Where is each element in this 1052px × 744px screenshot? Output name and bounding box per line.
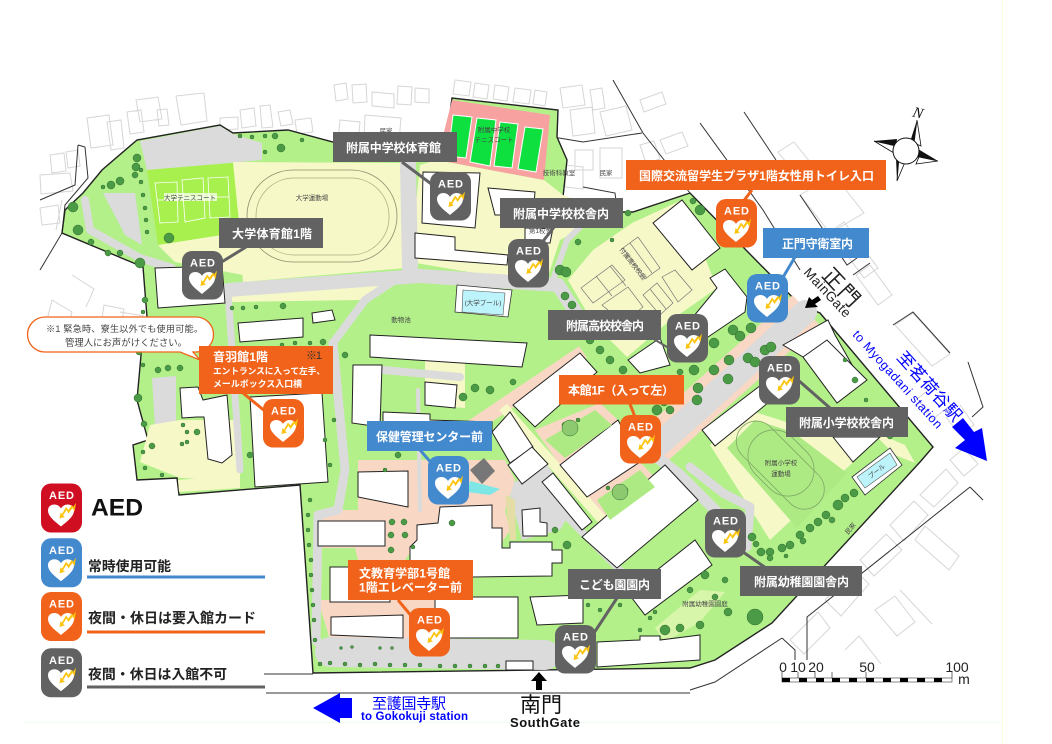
label: to Gokokuji station: to Gokokuji station [361,711,468,723]
elementary school field [727,413,847,528]
callout: 附属高校校舎内 [548,310,672,350]
icon: AED blue main gate [747,274,788,322]
icon: AED orange main hall: AED [628,422,653,434]
icon: AED orange [41,592,82,641]
scale bar [779,659,970,687]
icon: AED red: AED [49,490,74,502]
yellow diagonal walkway [503,407,607,525]
icon: AED orange Otowa: AED [271,406,296,418]
small map labels: 技術科教室 [543,168,576,177]
callout: 音羽館1階: エントランスに入って左手、 [213,365,325,376]
callout: 附属幼稚園園舎内: 附属幼稚園園舎内 [754,574,849,589]
icon: AED grey kindergarten [705,509,746,558]
callout: 本館1F: 本館1F（入って左） [568,382,674,398]
junior high tennis court: 附属中学校 [478,125,511,134]
legend: entry card needed [87,610,265,634]
callout: 文教育学部1号館: 1階エレベーター前 [359,580,462,594]
callout: 国際交流留学生プラザ1階女性用トイレ入口 [626,160,886,203]
label: South Gate: SouthGate [510,715,580,730]
icon: AED grey [41,648,82,697]
campus grounds [62,98,933,673]
label: to Gokokuji station: 至護国寺駅 [372,696,446,712]
water feature and plaza details [467,458,516,540]
small map labels: 民家 [380,126,393,135]
high school courts [581,237,692,323]
icon: AED orange: AED [49,599,74,611]
icon: AED grey junior school: AED [516,246,541,258]
university tennis courts [147,163,240,245]
arrow: to Myogadani [952,418,987,461]
callout: 緊急時 note [28,317,214,360]
callout: 正門守衛室内 [763,228,869,279]
icon: AED orange plaza: AED [724,206,749,218]
legend: entry card needed: 夜間・休日は要入館カード [88,610,256,626]
icon: AED grey elementary: AED [767,363,792,375]
icon: AED grey high school [667,314,708,362]
junior high tennis court [437,100,550,180]
legend: no entry: 夜間・休日は入館不可 [88,666,227,682]
callout: 附属幼稚園園舎内 [740,552,862,596]
panel: campus map [62,98,933,673]
label: South Gate [510,694,580,730]
label: South Gate: 南門 [520,694,562,717]
arrow: main gate [805,296,821,308]
icon: AED orange main hall [620,415,661,464]
university pool [455,285,512,317]
roads [85,165,805,655]
callout: 附属小学校校舎内: 附属小学校校舎内 [799,415,894,430]
callout: 大学体育館1階: 大学体育館1階 [232,226,312,241]
icon: AED grey nursery [555,625,596,674]
callout: 附属高校校舎内: 附属高校校舎内 [566,318,644,333]
callout: 文教育学部1号館 [348,560,473,618]
icon: AED grey gym: AED [190,258,215,270]
elementary school field: 附属小学校 [765,458,798,467]
small map labels: 付属高校校庭 [617,245,649,282]
arrow: south gate [531,672,547,690]
callout: こども園園内: こども園園内 [579,577,650,592]
arrow: to Gokokuji [313,693,352,723]
neighbourhood road lines [40,80,983,693]
neighbouring houses [40,80,978,664]
icon: AED red [41,484,82,532]
scale bar: 10 [790,659,806,675]
callout: 国際交流留学生プラザ1階女性用トイレ入口: 国際交流留学生プラザ1階女性用トイレ入口 [639,168,874,183]
callout: こども園園内 [568,569,661,636]
university athletic field: 大学運動場 [296,193,329,202]
legend title: AED [91,494,143,522]
beige grounds [140,160,915,642]
callout: 附属中学校体育館 [333,132,457,186]
scale bar: 50 [859,659,875,675]
icon: AED grey high school: AED [675,321,700,333]
icon: AED blue [41,538,82,587]
callout: 緊急時 note: 管理人にお声がけください。 [65,337,187,348]
icon: AED orange Otowa [263,399,304,448]
university athletic field [247,170,397,262]
icon: AED grey junior school [508,239,549,288]
callout: 附属小学校校舎内 [786,380,908,437]
callout: 保健管理センター前 [367,421,492,466]
icon: AED grey gym [182,251,223,300]
small map labels: 動物池 [391,315,411,324]
elementary school pool [852,448,902,495]
legend: no entry [87,666,265,688]
callout: 音羽館1階: メールボックス入口横 [213,378,302,389]
callout: 音羽館1階: 音羽館1階 [213,349,268,364]
callout: 音羽館1階: ※1 [306,350,322,362]
callout: 正門守衛室内: 正門守衛室内 [782,236,853,251]
pink plazas [318,310,806,640]
icon: AED orange plaza [716,199,757,248]
label: to Myogadani station: 至茗荷谷駅 [893,348,965,425]
small map labels: 民家 [842,520,858,536]
grey service areas [103,126,575,540]
icon: compass [874,104,938,181]
trees [68,133,893,668]
small map labels: 附属幼稚園園庭 [682,599,728,608]
icon: AED grey nursery: AED [563,632,588,644]
legend: always available: 常時使用可能 [88,558,171,574]
icon: AED blue health centre [428,456,469,504]
scale bar: 0 [779,659,787,675]
callout: 附属中学校校舎内 [500,198,623,245]
scale bar: 20 [808,659,824,675]
callout: 附属中学校校舎内: 附属中学校校舎内 [513,206,609,221]
small map labels: 民家 [600,168,613,177]
university pool: (大学プール) [465,298,501,307]
icon: AED grey junior gym [430,172,471,220]
scale bar: m [958,671,970,687]
junior high tennis court: テニスコート [474,136,514,144]
university tennis courts: 大学テニスコート [164,193,216,202]
panel: legend [41,484,265,697]
green courtyards [545,410,655,520]
icon: AED blue: AED [49,545,74,557]
elementary school pool: プール [867,462,887,481]
icon: AED grey junior gym: AED [438,179,463,191]
small map labels [380,126,858,608]
callout: 音羽館1階 [199,346,333,417]
elementary school field: 運動場 [771,469,791,478]
icon: AED orange faculty: AED [417,615,442,627]
icon: AED grey: AED [49,655,74,667]
callout: 本館1F [559,375,684,417]
label: Main Gate: MainGate [801,265,854,320]
buildings [155,172,880,670]
scale bar: 100 [945,659,969,675]
icon: AED grey elementary [759,356,800,404]
label: to Gokokuji station [361,696,468,723]
callout: 大学体育館1階 [219,218,323,263]
icon: AED blue health centre: AED [436,463,461,475]
callout: 保健管理センター前: 保健管理センター前 [376,429,483,444]
callout: 附属中学校体育館: 附属中学校体育館 [346,140,441,155]
callout: 緊急時 note: ※1 緊急時、寮生以外でも使用可能。 [46,323,203,334]
small map labels: 第1校舎 [529,226,552,235]
legend: always available [87,558,265,578]
callout: 文教育学部1号館: 文教育学部1号館 [359,566,450,580]
label: Main Gate: 正門 [817,264,864,312]
icon: AED grey kindergarten: AED [713,516,738,528]
icon: compass: N [910,104,926,123]
label: to Myogadani station: to Myogadani station [850,328,945,431]
icon: AED blue main gate: AED [755,281,780,293]
icon: AED orange faculty [409,608,450,656]
